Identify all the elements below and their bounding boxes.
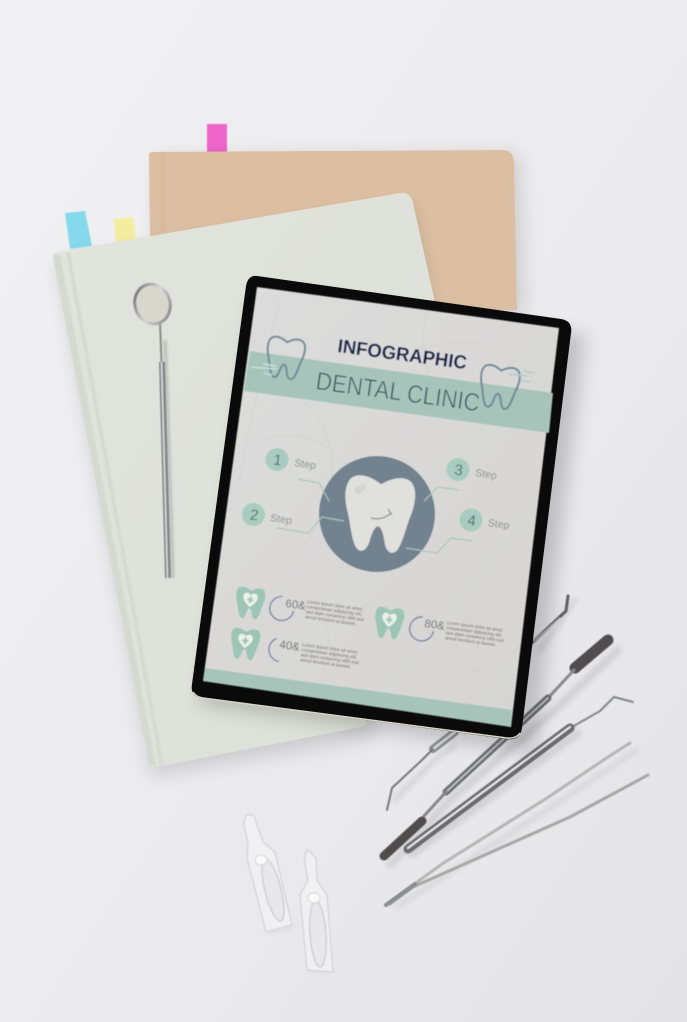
step 2: 2 bbox=[249, 507, 259, 525]
glass ampoules bbox=[244, 814, 336, 972]
step 4: 4 bbox=[466, 512, 477, 530]
stat: 80 percent: consectetuer adipiscing elit, bbox=[446, 625, 503, 638]
icon: tooth with cross bbox=[373, 606, 405, 640]
stat: 40 percent: consectetuer adipiscing elit, bbox=[301, 647, 358, 660]
tab: blue bbox=[65, 211, 92, 249]
step 4: Step bbox=[487, 517, 510, 532]
progress arc bbox=[410, 617, 434, 641]
stat: 60 percent: 60& bbox=[285, 598, 307, 613]
stat: 80 percent: Lorem ipsum dolor sit amet, bbox=[447, 620, 504, 633]
stat: 40 percent: 40& bbox=[279, 639, 301, 654]
tablet shadow bbox=[200, 290, 585, 753]
faint background swirls bbox=[240, 300, 540, 700]
step 2: Step bbox=[270, 512, 293, 527]
icon: tooth with cross bbox=[229, 627, 261, 661]
stat: 60 percent: consectetuer adipiscing elit, bbox=[306, 604, 363, 617]
step 1: Step bbox=[294, 457, 317, 472]
step 3: 3 bbox=[453, 462, 464, 480]
stat: 60 percent: sed diam nonummy nibh euit bbox=[305, 609, 365, 622]
stat: 40 percent: sed diam nonummy nibh euit bbox=[300, 652, 360, 665]
green header band bbox=[244, 351, 553, 433]
tool: probe upper bbox=[387, 596, 568, 810]
icon: tooth bbox=[342, 474, 416, 554]
progress arc bbox=[270, 596, 294, 620]
photo scene bbox=[53, 123, 650, 974]
screen bbox=[203, 287, 559, 727]
stat: 80 percent: 80& bbox=[424, 618, 446, 633]
stat: 80 percent bbox=[373, 606, 506, 648]
ampoule left bbox=[244, 814, 296, 933]
tooth shine bbox=[353, 482, 367, 496]
green footer band bbox=[203, 668, 512, 727]
tooth smile bbox=[371, 509, 392, 519]
stat: 60 percent bbox=[234, 586, 366, 627]
stat: 40 percent bbox=[229, 627, 361, 670]
stat: 60 percent: Lorem ipsum dolor sit amet, bbox=[307, 599, 364, 612]
connector lines bbox=[277, 479, 472, 553]
subtitle: DENTAL CLINIC bbox=[314, 367, 481, 417]
icon: tooth with cross bbox=[234, 586, 266, 620]
notebook: pale green bbox=[53, 193, 434, 776]
stat: 40 percent: Lorem ipsum dolor sit amet, bbox=[302, 642, 359, 655]
central circle with tooth bbox=[319, 456, 435, 572]
ampoule right bbox=[300, 850, 336, 972]
step 3 bbox=[446, 458, 498, 482]
tab: yellow bbox=[114, 217, 136, 243]
dental mirror bbox=[130, 280, 175, 578]
step 3: Step bbox=[475, 467, 498, 482]
stat: 40 percent: amod tincidunt ut laoreet. bbox=[300, 657, 352, 669]
title: INFOGRAPHIC bbox=[336, 336, 468, 374]
step 2 bbox=[242, 503, 293, 527]
stat: 80 percent: amod tincidunt ut laoreet. bbox=[445, 635, 497, 647]
tool: spatula bbox=[384, 640, 608, 856]
step 1 bbox=[266, 448, 317, 472]
icon: tooth outline right bbox=[477, 364, 535, 410]
tool: tweezers bbox=[386, 743, 648, 905]
tool: explorer bbox=[408, 697, 633, 849]
notebook: tan bbox=[149, 150, 524, 316]
tab: pink bbox=[207, 124, 227, 153]
sticky tabs bbox=[65, 124, 227, 249]
progress arc bbox=[269, 638, 279, 662]
dental tools bbox=[384, 596, 648, 908]
icon: tooth outline left bbox=[251, 336, 306, 381]
step 1: 1 bbox=[272, 452, 283, 470]
step 4 bbox=[460, 508, 510, 532]
stat: 80 percent: sed diam nonummy nibh euit bbox=[445, 630, 505, 643]
tablet body bbox=[192, 276, 571, 739]
screen background bbox=[203, 287, 559, 727]
stat: 60 percent: amod tincidunt ut laoreet. bbox=[305, 614, 357, 626]
tablet bbox=[192, 276, 571, 739]
tablet lower edge highlight bbox=[193, 692, 520, 738]
tool shadows bbox=[390, 600, 637, 908]
